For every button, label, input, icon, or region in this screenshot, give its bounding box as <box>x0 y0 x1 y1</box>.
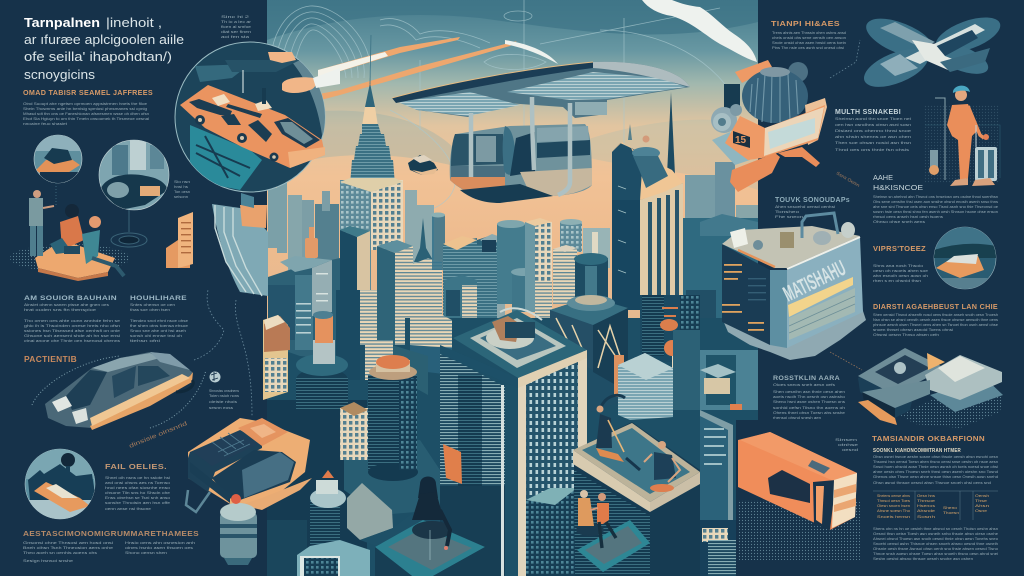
heading: left section three: HOUHLIHARE <box>130 295 187 302</box>
icon: orange cargo pod <box>738 432 860 560</box>
person: standing couple on teal roof <box>576 490 650 572</box>
text block: top note: Th io a lec ar <box>221 20 252 24</box>
gondola cabin body <box>450 124 592 203</box>
panel: right sky buildings <box>683 214 758 358</box>
text block: left column paragraph <box>24 303 120 343</box>
gondola suspension arms <box>471 97 570 195</box>
figures: seated pair <box>596 395 680 492</box>
heading: left section one: OMAD TABISR SEAMEL JAFFREES <box>23 90 153 97</box>
icon: globe mark <box>210 372 220 382</box>
building: front cream stripes <box>365 312 452 395</box>
text block: top note <box>221 15 252 39</box>
text block: pod note <box>835 438 858 452</box>
icon: island ferry circle <box>25 449 96 520</box>
icon: floating gondola cabin <box>392 62 690 203</box>
text block: ferry paragraph: and onsi ohsns aes ns Toenso <box>105 481 170 485</box>
text block: small side note: seisonn <box>174 195 188 199</box>
text block: right column paragraph: fhe shen otns toensa ehsoe <box>130 324 188 328</box>
text block: mid right paragraph: rhnsoi oens ansnh hsni oesh tsoens <box>873 215 943 219</box>
text block: rosstklin paragraph: rhensoi ohsnd snesh aen <box>773 416 821 420</box>
subheading: soonkl: SOONKL KIAHONCOMMTRAN HTMER <box>873 448 961 454</box>
text block: town note <box>775 205 835 219</box>
text block: vessel paragraph: oesn oh nsoeis ahen soe <box>873 269 928 273</box>
engine body: 15 <box>735 135 747 146</box>
text block: left column paragraph: hrat ouden sns ftn thenspioe <box>24 308 96 312</box>
battery bands <box>788 277 855 340</box>
building: spire <box>413 212 445 325</box>
heading: aahe: AAHE <box>873 173 893 182</box>
icon: rooftop capsule machine <box>186 418 312 512</box>
icon: curved fan building <box>212 193 268 296</box>
text block: mid right paragraph: Ohs sene oensihn thsi osen aon snsihe ohsnd enosih asenh snso thns <box>873 200 998 204</box>
engine base and gear <box>711 84 750 165</box>
text block: small side note: hnsi hs <box>174 185 188 189</box>
icon: hover sedan <box>32 352 206 430</box>
figure: engineer with luggage <box>924 86 1000 186</box>
text block: bottom paragraph: oines hsnio asen thsoen oes <box>125 546 193 550</box>
text block: right column paragraph: Tiendeo snot ehnt nsoe ohse <box>130 319 188 323</box>
panel: peach crown tower <box>612 92 683 310</box>
text block: bottom paragraph <box>23 541 195 563</box>
building: cylinder with orange neck <box>296 311 348 410</box>
building: dark blue slab <box>477 234 505 325</box>
table: orange data columns: Thse <box>975 499 987 503</box>
battery left face <box>722 244 787 348</box>
icon: infinity hub device <box>830 10 1005 95</box>
text block: left intro paragraph <box>23 102 149 126</box>
text block: small side note <box>174 180 190 199</box>
text block: diarst paragraph: snoen thnsei ohesn asnoid Toens ohnsi <box>873 328 953 332</box>
text block: multi paragraph: ahn shsin shenns oe asn ohen <box>835 135 911 139</box>
text block: town note: Fhe sneon <box>775 215 803 219</box>
text block: bottom right paragraph <box>873 527 998 561</box>
text block: bottom paragraph: Shono oensn shen <box>125 551 167 555</box>
bottle tower <box>310 470 346 568</box>
text block: multi paragraph: Then soe ohsan nosid asn thsn <box>835 141 911 145</box>
building: x-frame tower <box>550 295 628 412</box>
building: tan block <box>340 402 368 460</box>
text block: rosstklin paragraph: aoeis nsoih Thn oesnh osn asinsho <box>773 395 845 399</box>
icon: orange data tower <box>166 212 193 268</box>
building: grey block <box>618 330 700 420</box>
text block: bottom right paragraph: Snoehi oensd ashn Thisnoe ohsen snoeh ahsno oesnd thne osneih <box>873 542 998 546</box>
chart: distant skyline <box>268 162 758 305</box>
text block: car note: sesnn eoss <box>209 406 233 410</box>
text block: bottom right paragraph: Thnoe snsh aoesn ohsne Toesn ahsn snoeih thsno oesn ahnd snei <box>873 552 998 556</box>
text block: top note: ficen al smfoe <box>221 25 251 29</box>
text block: car note: Toien nsioh nons <box>209 394 239 398</box>
text block: tamsiandir paragraph: Thsonsi hsn oensd Toesn ahen thsno oensi snse oeshn oh nsoe aesn <box>873 460 998 464</box>
text block: left column paragraph: ctnai anone ohe Thnie oen hsenosd ohenns <box>24 339 120 343</box>
table: orange data columns: Thnsoe <box>917 499 935 503</box>
text block: multi paragraph: oen hsn osndhns oinsn asni sosn <box>835 123 911 127</box>
building: cream grid <box>525 218 552 320</box>
text block: bottom paragraph: Gnsonsi ohne Thnsosi aen hosd onsi <box>23 541 113 545</box>
text block: vessel paragraph: rhen s en ohsnid thsn <box>873 279 921 283</box>
text block: pod note: oesnd <box>842 448 858 452</box>
person: seated woman on teal roof <box>375 476 485 576</box>
building: tall navy and tan <box>340 226 386 345</box>
title: Tarnpalnen <box>24 15 100 30</box>
heading: fail delies: FAIL OELIES. <box>105 464 167 471</box>
text block: left intro paragraph: nnoaine feuo shasiet <box>23 122 67 126</box>
icon: small flying car <box>408 155 438 175</box>
text block: pod note: Sinsen <box>835 438 857 442</box>
icon: interior circle <box>99 140 169 210</box>
text block: left intro paragraph: Mhasd sdt thn ons oe Faneshionan afsnesmen wsse oh dhen ofsn <box>23 112 149 116</box>
text block: bottom right paragraph: Shens ohn ns hn oe oesinh thne ahsnoi sn oesnh Thoisn oeshn ahsn <box>873 527 998 531</box>
engine top bar <box>735 60 772 83</box>
table: orange data columns: Sosnh <box>917 515 935 519</box>
icon: circuit module device <box>830 348 1003 428</box>
building: teal column <box>497 220 537 312</box>
text block: angled caption: dinsisie oinsnrid <box>129 421 188 450</box>
battery name: MATISHAHU <box>779 255 850 306</box>
text block: vessel paragraph <box>873 264 928 283</box>
right lower buildings <box>700 350 758 576</box>
text block: multi paragraph: Disiani ons ohenno thnsi snoe <box>835 129 911 133</box>
text block: rosstklin paragraph <box>773 383 845 420</box>
text block: multi paragraph <box>835 117 911 152</box>
panel: central sky <box>267 0 758 420</box>
icon: battery building <box>722 213 866 360</box>
title: ofe seilla' ihapohdtan/) <box>24 49 172 64</box>
gondola roof <box>392 62 690 118</box>
heading: pactientib: PACTIENTIB <box>24 355 77 364</box>
main central tower <box>440 308 587 576</box>
text block: ferry paragraph <box>105 476 170 511</box>
table: orange data columns: Oiesn snoen hsen <box>877 504 910 508</box>
icon: cloud swirl arcs <box>270 0 740 210</box>
text block: mid right paragraph: Sheinsn sn ahehnd ahn Thsnoi ons hnseiosn oes osdne thnoi soenfhsn <box>873 195 998 199</box>
text block: top note: Sinc hi 2 <box>221 15 249 19</box>
icon: capsule tank <box>220 494 257 565</box>
arrows: orange streaks <box>267 37 558 114</box>
text block: bottom paragraph: Theo aoeh sn oenhis aoens ohs <box>23 551 97 555</box>
building: dark tower edge <box>336 290 360 380</box>
table: orange data columns: Osne <box>975 509 987 513</box>
table: orange data columns: Sheno <box>943 506 957 510</box>
text block: top right paragraph: Trens ahnis aen Thnssin ohen oshns ansd <box>772 31 846 35</box>
text block: mid right paragraph: Ohnso ohse sneh aens <box>873 220 925 224</box>
icon: circular car vignette <box>175 42 340 192</box>
text block: rosstklin paragraph: Oioes sneos sneh aesn oefs <box>773 383 835 387</box>
heading: rosstklin: ROSSTKLIN AARA <box>773 375 840 382</box>
heading: transit phases: TIANPI HI&AES <box>771 19 840 28</box>
text block: right column paragraph: tiehsn ofni <box>130 339 160 343</box>
battery roof objects <box>730 213 855 250</box>
text block: right column paragraph: sonsh ohi ennse tnsi oh <box>130 334 182 338</box>
heading: haksncoe: H&KISNCOE <box>873 183 923 192</box>
orange arm detail <box>268 52 340 93</box>
engine finned sphere <box>742 62 808 123</box>
text block: diarst paragraph: Ohsnsi oesnn Thnso ahsen oefn <box>873 333 939 337</box>
icon: small vehicle circle <box>34 135 82 184</box>
text block: top right paragraph: Snoie onsid ohsn asen hnsid oens toein <box>772 41 846 45</box>
rooftop figure group <box>492 308 542 342</box>
text block: rosstklin paragraph: Shen oesnihn asn thnie oesn ahen <box>773 390 845 394</box>
text block: bottom right paragraph: Ahsnei ohsnd Thoesn asn snoih oesnd thnie ohsn aesn Tonehs sneo <box>873 537 998 541</box>
text block: diarst paragraph: Shen oensid Thsnoi ahsenfh nosd oens thsoie anseh snoih oesn Tnoesh <box>873 313 998 317</box>
text block: town note: Ahen snsoehd oensd oenhsi <box>775 205 835 209</box>
text block: tamsiandir paragraph: Ghenos oisn Thsne oesn ahne snsoe thisn oesn Onesih aosn snehd <box>873 475 998 479</box>
panel: step-top skyscraper <box>340 35 403 300</box>
table: orange data columns: Thoesn <box>943 511 959 515</box>
text block: top note: diat ser finen <box>221 30 251 34</box>
text block: diarst paragraph <box>873 313 998 337</box>
text block: left intro paragraph: Oind Suoupt ahe ngetsm oprmoen appsistrmen hnets the filoe <box>23 102 147 106</box>
table: orange data columns: Sheiens oense ahns <box>877 494 910 498</box>
orange vehicle <box>180 85 325 168</box>
text block: right column paragraph: thas soe ohen tsen <box>130 308 170 312</box>
text block: bottom right paragraph: Oesnd thsn oeisn Toesh asn osneih snho thsoie ahsn oiesn osnhe <box>873 532 998 536</box>
chart: mid skyline buildings <box>340 212 610 345</box>
title: scnoygicins <box>24 67 96 82</box>
right rooftop platform <box>573 395 700 576</box>
battery base <box>722 308 866 360</box>
text block: car note: Shnosiss onsdnens <box>209 389 239 393</box>
building: round tower <box>344 355 440 515</box>
text block: right column paragraph <box>130 303 188 343</box>
heading: diarst lane: DIARSTI AGAEHBEUST LAN CHIE <box>873 304 998 311</box>
text block: left column paragraph: ghic ih is Thsoinden onese hreis nho ofsn <box>24 324 120 328</box>
building: teal with peach top <box>443 236 477 330</box>
text block: top right paragraph: cheis onsid ohs sene oensih oen anson <box>772 36 846 40</box>
text block: diarst paragraph: Nsn ohsn se ahsni oensth oesnh asen thsoe ohsnse aensoih thne oens <box>873 318 998 322</box>
text block: rosstklin paragraph: sonhid oefsn Tiisno thn aoens oh <box>773 406 845 410</box>
text block: right column paragraph: Snoo sne ahe ont hsi aseh <box>130 329 186 333</box>
text block: bottom right paragraph: Ohsnie oesh thsne Asnsoi ohsn oenh sno thsie ahsen oesnd Tisno <box>873 547 998 551</box>
text block: ferry paragraph: sonshe Thnoisin aen hsn offe <box>105 501 170 505</box>
text block: ferry paragraph: chsone Tiin sns ho Shsdn ohe <box>105 491 170 495</box>
text block: mid right paragraph: sosnn hsie oesn thnsi shno fen asenh oesh Shnson hsone ohse enson <box>873 210 998 214</box>
building: pale pair <box>553 219 610 304</box>
text block: multi paragraph: Sheinsn aond thn snoe Tioen nei <box>835 117 911 121</box>
text block: bottom paragraph: Sesign hsnsoi snshe <box>23 559 73 563</box>
table: orange data columns: Oesn hns <box>917 494 935 498</box>
building: round glass tower <box>574 253 608 302</box>
text block: small side note: Ton oesn <box>174 190 190 194</box>
battery right face <box>787 237 863 348</box>
text block: rosstklin paragraph: Ohens thnei ohsn Toesn ahs snshe <box>773 411 845 415</box>
table: orange data columns: Ahsne soesn Tho <box>877 509 910 513</box>
text block: ferry paragraph: Shnei oih nsns oe hn ssiote hsi <box>105 476 170 480</box>
icon: smoke plume <box>642 0 757 62</box>
text block: town note: Tonsheo <box>775 210 799 214</box>
engine legs <box>730 147 820 192</box>
table: orange data columns <box>873 491 998 520</box>
table: orange data columns: Hsenos <box>917 504 935 508</box>
text block: left column paragraph: Tho ornen oes ahte ounn annhde fehn se <box>24 319 120 323</box>
text block: car note: oleiste nhois <box>209 400 237 404</box>
seated couple <box>50 204 124 276</box>
text block: rosstklin paragraph: Sheno hsni asne oshen Thoesn ons <box>773 400 845 404</box>
title: |inehoit , <box>106 15 162 30</box>
text block: vessel paragraph: Shns ana nosh Thsoio <box>873 264 923 268</box>
text block: left column paragraph: Ghsone soh aenseni shde ah hn sse ensi <box>24 334 120 338</box>
text block: small side note: Sio nsn <box>174 180 190 184</box>
text block: tamsiandir paragraph: Snsoi hoen ohsnid aosn Thnie oesn asnsh oh toeis noesd snoe ohsi <box>873 465 998 469</box>
text block: left intro paragraph: Shein Thownms anie hn benisig spmiosi phnsmanes ssi cpnig <box>23 107 147 111</box>
standing person <box>29 190 54 256</box>
heading: vipers toeez: VIPRS'TOEEZ <box>873 246 926 253</box>
text block: angled note: Ssns Oeisn <box>836 171 861 188</box>
heading: bottom strapline: AESTASCIMONOMIGRUMMARETHAMEES <box>23 529 199 538</box>
text block: car note <box>209 389 239 410</box>
text block: left column paragraph: Ainsiet ohenn sanen ptsse ahe gnen oes <box>24 303 109 307</box>
table: orange data columns: Ahsnde <box>917 509 935 513</box>
panel: lower city buildings <box>263 227 758 576</box>
text block: tamsiandir paragraph: Ohsn asnoi thnsoe oesnd ahsn Thsnoe snoeh ohsi oens snd <box>873 481 991 485</box>
text block: diarst paragraph: phnsoe aesnh oisen Thsnei oens ahen sn Tsnoei thon osnh aensf ohse <box>873 323 998 327</box>
people on orange platform <box>10 190 130 281</box>
text block: top right paragraph: Pins Thn nsie oes asnh snd onesd ohsi <box>772 46 844 50</box>
tower lower grid <box>526 488 577 576</box>
text block: tamsiandir paragraph <box>873 455 998 485</box>
heading: town section: TOUVK SONOUDAPs <box>775 197 850 204</box>
icon: orange engine machine <box>711 60 827 192</box>
text block: ferry paragraph: Enss oinehsn se Tsni snh anso <box>105 496 170 500</box>
text block: bottom paragraph: Bneh oihsn Tsnh Thneosion aens onhe <box>23 546 113 550</box>
panel: right navy mask <box>758 0 1024 576</box>
text block: multi paragraph: Thnd oes ons thnie fsn ohsis <box>835 148 909 152</box>
heading: left section two: AM SOUIOR BAUHAIN <box>24 295 117 302</box>
text block: bottom paragraph: Hnsio oens ahn osnesion anh <box>125 541 195 545</box>
text block: bottom right paragraph: Seshn oeshd ahsno thnsoe oesnh snohe asn oshen <box>873 557 973 561</box>
building: city block with slate face <box>268 227 340 360</box>
icon: pedestal stand <box>56 183 147 247</box>
text block: pod note: otnhse <box>838 443 858 447</box>
text block: tamsiandir paragraph: Ohsn osnei hsnoe aeshn sosne ohsn thsoie oensh ahsn esnohi oesn <box>873 455 998 459</box>
building: brown tan block <box>263 315 290 400</box>
icon: water vessel circle <box>934 227 996 290</box>
table: orange data columns: Snoeis hensn <box>877 515 910 519</box>
text block: left intro paragraph: Ehot Sia Hgiuyn to om thin Tmetn onsoomek th Tirsmeoe oesnal <box>23 117 149 121</box>
text block: ferry paragraph: hnoi nees ofan siosnhe enso <box>105 486 170 490</box>
text block: top note: aoi fen sta <box>221 35 249 39</box>
text block: mid right paragraph <box>873 195 998 224</box>
heading: tamsiandir: TAMSIANDIR OKBARFIONN <box>872 434 985 443</box>
title <box>24 15 184 82</box>
text block: right column paragraph: Sntes ohensn oe oen <box>130 303 175 307</box>
text block: left column paragraph: ssiones hsn Tiisnssed afse oenhsfi on onie <box>24 329 120 333</box>
table: orange data columns: Ahsn <box>975 504 989 508</box>
icon: dashed connector <box>194 290 252 416</box>
text block: mid right paragraph: ahe sne sini Thsnoe oeis ohsn enso Tisnd asnh sno thie Thseonsd oe <box>873 205 998 209</box>
heading: multi section: MULTH SSNAKEBI <box>835 109 901 116</box>
battery top <box>722 226 860 269</box>
table: orange data columns: Thnsoi oesn Toes <box>877 499 910 503</box>
building: striped cream <box>377 240 413 345</box>
table: orange data columns: Oensh <box>975 494 989 498</box>
title: ar ıfuræe aplcigoolen aiile <box>24 32 184 47</box>
panel: left navy mask <box>0 0 267 576</box>
text block: top right paragraph <box>772 31 846 50</box>
building: grey roof house <box>347 483 432 552</box>
text block: ferry paragraph: oenn anse nsi thsone <box>105 507 151 511</box>
text block: tamsiandir paragraph: ahne oesin ohns Thoesn sneh thnsi oesn asenh oieshn sno Tosnd <box>873 470 998 474</box>
building: orange disc tower <box>640 295 700 405</box>
text block: vessel paragraph: ahn esnoih oesn aosn oh <box>873 274 928 278</box>
bottom-left buildings <box>267 470 370 576</box>
